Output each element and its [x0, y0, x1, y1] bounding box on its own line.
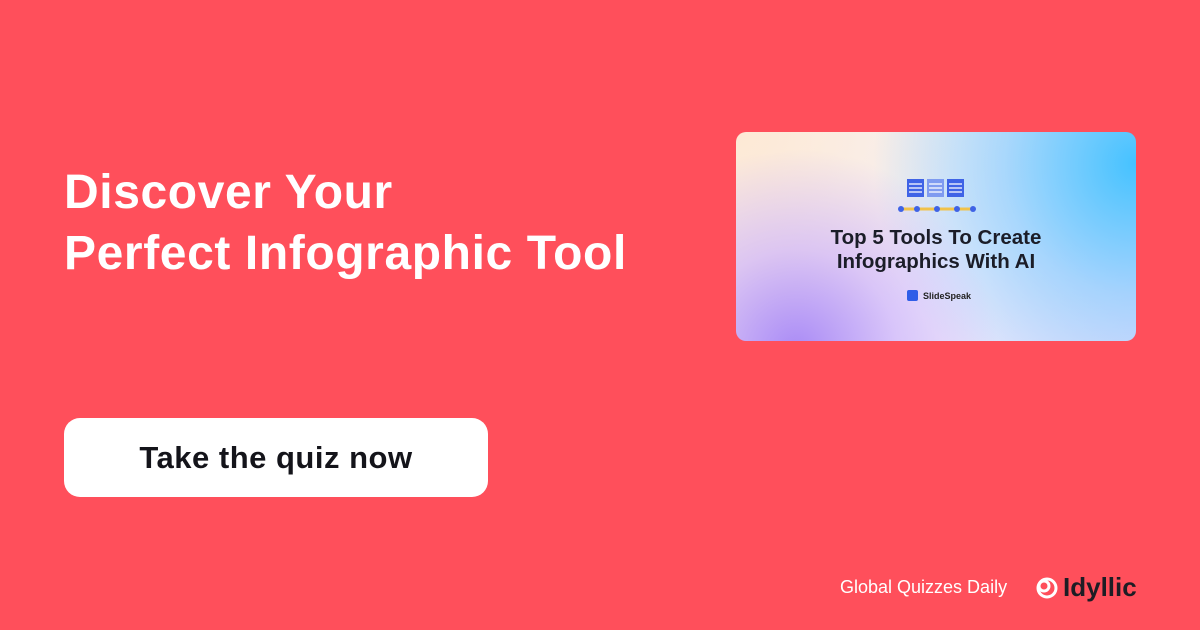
button: take the quiz: Take the quiz now [139, 440, 413, 474]
card: article preview [736, 132, 1136, 341]
title: Discover Your [64, 166, 393, 219]
title: Perfect Infographic Tool [64, 227, 627, 280]
card brand [907, 290, 971, 301]
card title [830, 226, 1041, 273]
title [64, 166, 627, 280]
card title: Top 5 Tools To Create [831, 226, 1041, 249]
card brand: SlideSpeak [923, 290, 971, 300]
footer text: Global Quizzes Daily [840, 577, 1007, 597]
card title: Infographics With AI [837, 250, 1035, 273]
button: take the quiz [64, 418, 488, 497]
logo: idyllic: Idyllic [1063, 572, 1137, 602]
icon: timeline [898, 179, 976, 212]
